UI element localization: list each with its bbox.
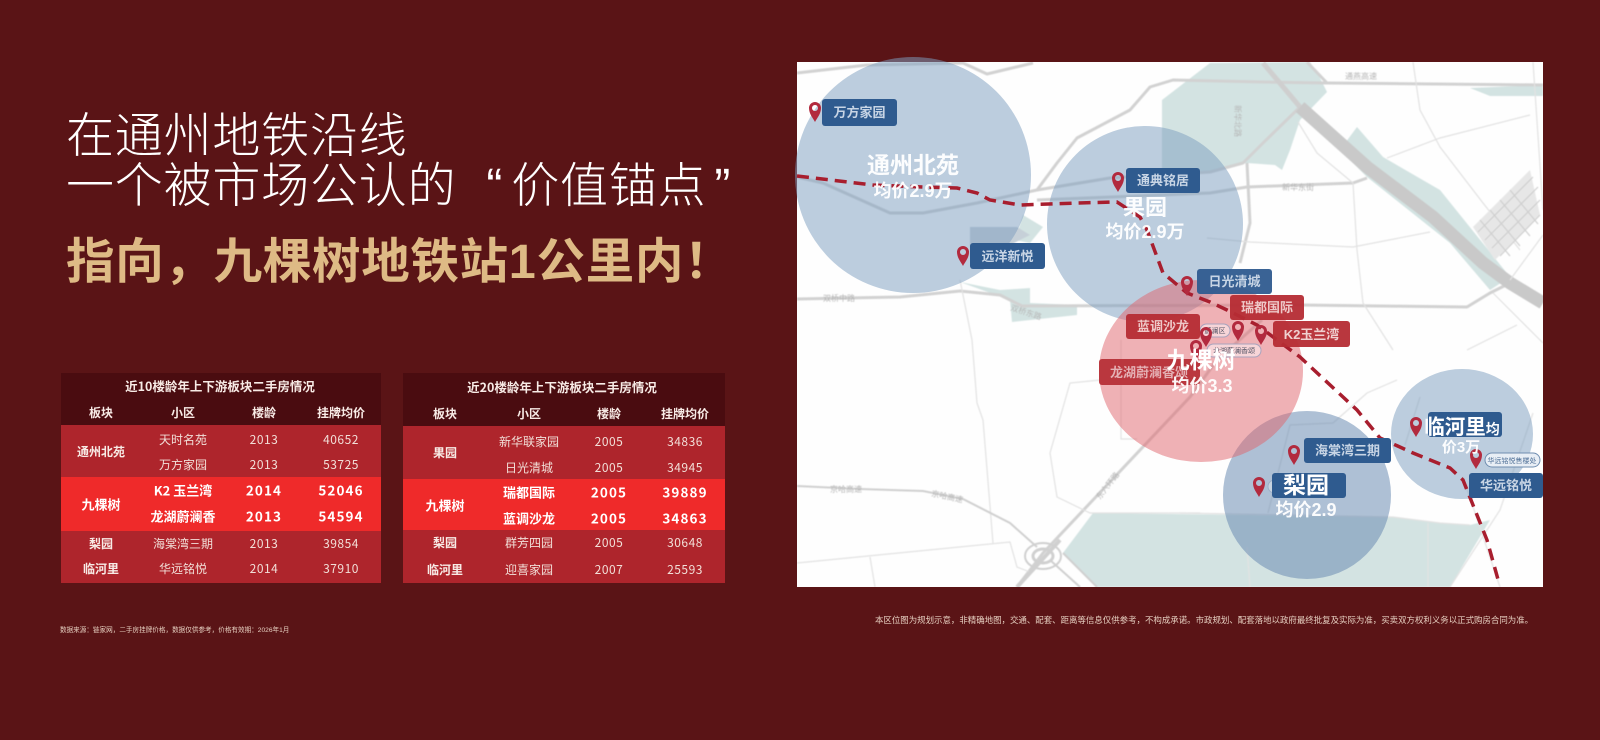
red community labels: 蓝调沙龙 <box>1137 319 1189 334</box>
table: 20-year blocks: 日光清城 <box>505 459 553 476</box>
table: 20-year blocks: 近20楼龄年上下游板块二手房情况 <box>467 377 657 396</box>
table: 10-year blocks: 天时名苑 <box>159 431 207 448</box>
table: 10-year blocks: 2013 <box>250 535 278 552</box>
table: 20-year blocks: 楼龄 <box>597 405 621 422</box>
circle: 梨园 <box>1223 411 1391 579</box>
circle: 临河里 <box>1391 369 1533 499</box>
table: 10-year blocks: 53725 <box>323 456 359 473</box>
red community labels <box>1099 295 1350 385</box>
table: 20-year blocks: 挂牌均价 <box>661 405 709 422</box>
subtitle: 指向，九棵树地铁站1公里内！ <box>66 235 733 289</box>
table: 10-year blocks: 万方家园 <box>159 456 207 473</box>
red community labels: K2玉兰湾 <box>1284 327 1339 342</box>
district names and average prices: 通州北苑 <box>867 152 959 178</box>
table: 20-year blocks: 临河里 <box>427 561 463 578</box>
table: 20-year blocks: 梨园 <box>433 534 457 551</box>
table: 20-year blocks: 2005 <box>595 459 623 476</box>
district names and average prices: 均价2.9万 <box>1105 222 1185 242</box>
table: 10-year blocks: 近10楼龄年上下游板块二手房情况 <box>125 376 315 395</box>
blue community labels: 远洋新悦 <box>981 249 1034 264</box>
map disclaimer: 本区位图为规划示意，非精确地图，交通、配套、距离等信息仅供参考，不构成承诺。市政规划、配套落地以政府最终批复及实际为准，买卖双方权利义务以正式购房合同为准。 <box>875 615 1533 625</box>
district names and average prices: 梨园 <box>1283 472 1329 498</box>
blue community labels: 华远铭悦 <box>1480 478 1532 493</box>
location pins <box>809 102 1482 497</box>
title <box>66 110 731 213</box>
table: 20-year blocks: 34863 <box>662 507 708 527</box>
blue community labels <box>822 99 1543 498</box>
table: 20-year blocks: 2007 <box>595 561 623 578</box>
table: 20-year blocks: 2005 <box>595 433 623 450</box>
small place tags <box>1200 324 1540 493</box>
table: 20-year blocks: 板块 <box>433 405 457 422</box>
table: 10-year blocks: 2013 <box>250 431 278 448</box>
map base: roads and green areas: 京哈高速 <box>830 484 862 494</box>
table: 20-year blocks: 小区 <box>517 405 541 422</box>
table: 10-year blocks: 2014 <box>250 560 278 577</box>
circle: 九棵树 <box>1099 280 1303 462</box>
small place tags: 华远铭悦售楼处 <box>1488 456 1536 465</box>
red community labels: 瑞都国际 <box>1241 300 1293 315</box>
table: 20-year blocks: 新华联家园 <box>499 433 559 450</box>
table: 10-year blocks: 通州北苑 <box>77 443 125 460</box>
data source note: 数据来源：链家网，二手房挂牌价格，数据仅供参考，价格有效期：2026年1月 <box>60 627 289 634</box>
title: 在通州地铁沿线 <box>66 110 408 163</box>
red community labels: 龙湖蔚澜香颂 <box>1110 365 1188 380</box>
map base: roads and green areas <box>797 62 1543 587</box>
table: 10-year blocks: 40652 <box>323 431 359 448</box>
table: 10-year blocks: 海棠湾三期 <box>153 535 213 552</box>
district names and average prices: 价3万 <box>1442 439 1480 456</box>
map base: roads and green areas: 京哈高速 <box>931 488 964 505</box>
map base: roads and green areas: 新华东街 <box>1282 182 1314 192</box>
table: 20-year blocks: 九棵树 <box>425 496 465 514</box>
table: 20-year blocks: 果园 <box>433 444 457 461</box>
district names and average prices: 均价3.3 <box>1171 376 1233 396</box>
table: 20-year blocks: 34945 <box>667 459 703 476</box>
table: 20-year blocks: 25593 <box>667 561 703 578</box>
blue community labels: 万方家园 <box>833 105 886 120</box>
district names and average prices: 临河里均 <box>1424 416 1500 439</box>
table: 20-year blocks: 迎喜家园 <box>505 561 553 578</box>
location map <box>795 57 1543 587</box>
district names and average prices: 均价2.9万 <box>873 181 953 201</box>
table: 10-year blocks: 52046 <box>318 479 364 499</box>
table: 10-year blocks: 2013 <box>250 456 278 473</box>
table: 10-year blocks: 华远铭悦 <box>159 560 207 577</box>
table: 20-year blocks: 30648 <box>667 534 703 551</box>
district names and average prices: 果园 <box>1123 195 1167 220</box>
table: 20-year blocks: 2005 <box>595 534 623 551</box>
table: 10-year blocks: 楼龄 <box>252 404 276 421</box>
table: 20-year blocks <box>403 373 725 583</box>
highway and interchange <box>797 486 1097 587</box>
table: 20-year blocks: 2005 <box>591 481 627 501</box>
table: 10-year blocks: 挂牌均价 <box>317 404 365 421</box>
table: 20-year blocks: 蓝调沙龙 <box>503 508 555 528</box>
blue community labels: 日光清城 <box>1208 274 1261 289</box>
table: 10-year blocks: 39854 <box>323 535 359 552</box>
table: 20-year blocks: 39889 <box>662 481 708 501</box>
title: 一个被市场公认的 “价值锚点” <box>66 160 731 213</box>
table: 10-year blocks: 九棵树 <box>81 494 121 514</box>
table: 20-year blocks: 34836 <box>667 433 703 450</box>
circle: 果园 <box>1047 126 1243 322</box>
table: 20-year blocks: 2005 <box>591 507 627 527</box>
district names and average prices: 九棵树 <box>1166 347 1236 373</box>
small place tags: 龙湖蔚澜香颂 <box>1213 346 1255 355</box>
district names and average prices: 均价2.9 <box>1275 500 1337 520</box>
blue community labels: 通典铭居 <box>1137 173 1189 188</box>
map base: roads and green areas: 东六环路 <box>1094 470 1121 501</box>
map base: roads and green areas: 双桥中路 <box>823 293 855 303</box>
table: 10-year blocks: 54594 <box>318 505 364 525</box>
blue community labels: 海棠湾三期 <box>1315 443 1380 458</box>
table: 10-year blocks: 37910 <box>323 560 359 577</box>
table: 20-year blocks: 群芳四园 <box>505 534 553 551</box>
table: 10-year blocks <box>61 373 381 583</box>
district names and average prices <box>867 152 1500 520</box>
table: 20-year blocks: 瑞都国际 <box>503 482 555 502</box>
table: 10-year blocks: 2013 <box>246 505 282 525</box>
table: 10-year blocks: 龙湖蔚澜香 <box>150 506 216 526</box>
metro line dashed <box>797 176 1499 583</box>
table: 10-year blocks: 梨园 <box>89 535 113 552</box>
map base: roads and green areas: 双桥东路 <box>1009 302 1043 322</box>
table: 10-year blocks: 临河里 <box>83 560 119 577</box>
table: 10-year blocks: K2 玉兰湾 <box>154 480 212 500</box>
small place tags: 蔚澜区 <box>1204 326 1226 335</box>
circle: 通州北苑 <box>795 57 1031 293</box>
map base: roads and green areas: 通燕高速 <box>1345 71 1377 81</box>
table: 10-year blocks: 2014 <box>246 479 282 499</box>
table: 10-year blocks: 板块 <box>89 404 113 421</box>
map base: roads and green areas: 新华北路 <box>1233 105 1243 137</box>
table: 10-year blocks: 小区 <box>171 404 195 421</box>
